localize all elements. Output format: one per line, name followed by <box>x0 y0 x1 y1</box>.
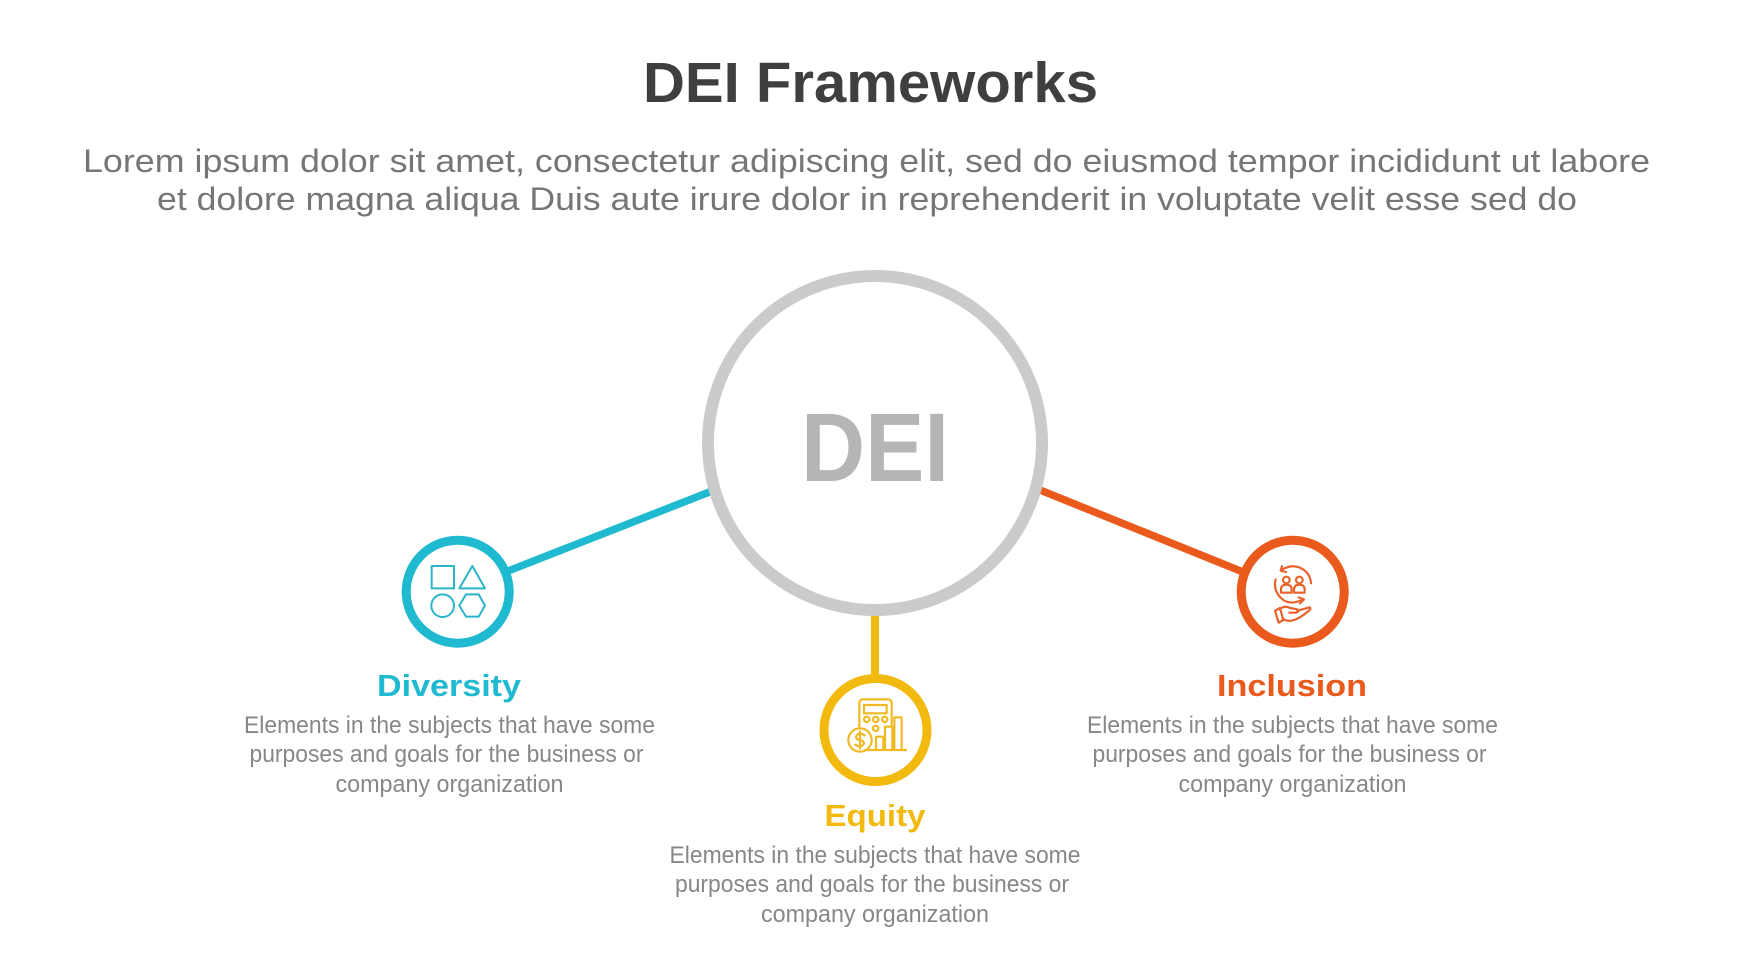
node circle: equity <box>824 678 927 782</box>
connector: inclusion <box>1040 490 1243 572</box>
heading: diversity: Diversity <box>377 668 522 703</box>
central DEI circle: DEI <box>801 393 949 502</box>
description: diversity: Elements in the subjects that have some <box>244 712 655 739</box>
description: inclusion <box>1087 712 1498 798</box>
connector: diversity <box>508 491 712 571</box>
icon: calculator and chart <box>848 699 906 752</box>
icon: people and hand <box>1275 566 1311 623</box>
description: diversity <box>244 712 655 798</box>
node circle: inclusion <box>1241 540 1344 643</box>
description: inclusion: purposes and goals for the business or <box>1092 741 1486 768</box>
subtitle text block <box>83 143 1650 217</box>
title: DEI Frameworks <box>643 51 1098 115</box>
connector: equity <box>871 612 879 678</box>
node circle: diversity <box>406 540 509 643</box>
description: equity: purposes and goals for the business or <box>675 871 1069 898</box>
panel: inclusion <box>1087 540 1498 798</box>
subtitle text block: Lorem ipsum dolor sit amet, consectetur adipiscing elit, sed do eiusmod tempor incididunt ut labore <box>83 143 1650 179</box>
description: equity: company organization <box>761 901 989 928</box>
central DEI circle <box>708 276 1042 610</box>
description: diversity: purposes and goals for the business or <box>250 741 644 768</box>
icon: shapes <box>431 566 485 617</box>
description: inclusion: company organization <box>1178 771 1406 798</box>
panel: diversity <box>244 540 655 798</box>
description: inclusion: Elements in the subjects that have some <box>1087 712 1498 739</box>
panel: equity <box>670 678 1080 928</box>
heading: inclusion: Inclusion <box>1217 668 1367 703</box>
description: equity <box>670 842 1080 928</box>
heading: equity: Equity <box>824 798 926 833</box>
description: diversity: company organization <box>336 771 564 798</box>
description: equity: Elements in the subjects that have some <box>670 842 1080 869</box>
subtitle text block: et dolore magna aliqua Duis aute irure dolor in reprehenderit in voluptate velit esse sed do <box>157 181 1577 217</box>
